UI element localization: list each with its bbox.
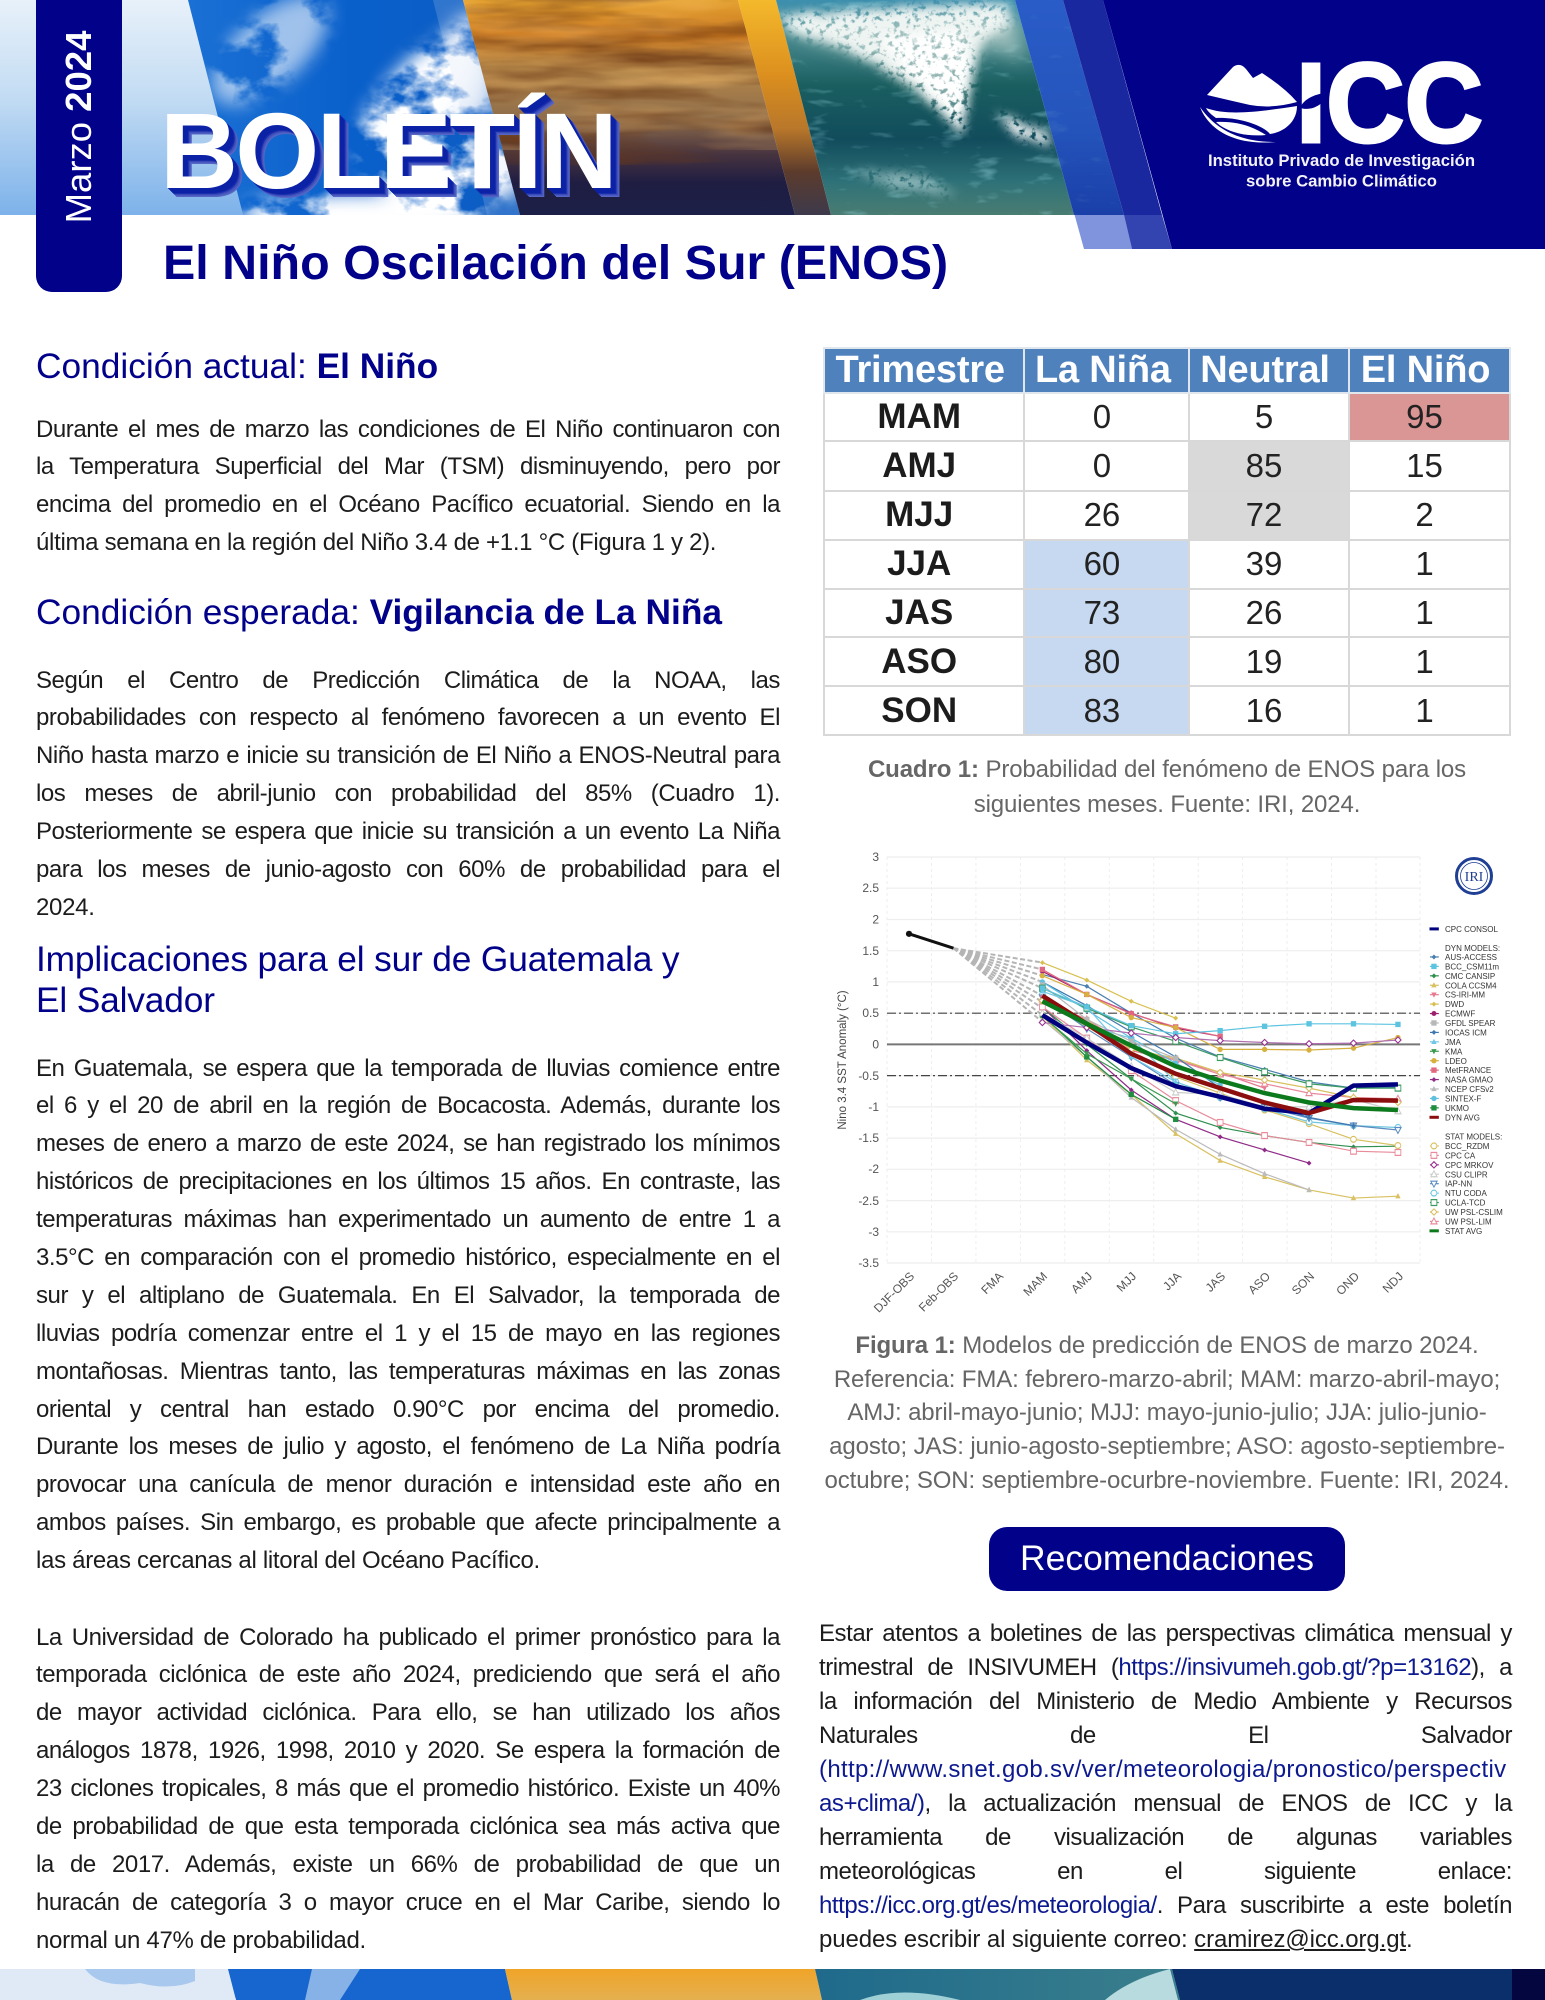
- text block: recomendaciones: puedes escribir al siguiente correo: cramirez@icc.org.gt.: [819, 1926, 1413, 1953]
- text block: pronóstico ciclónico: [36, 1624, 780, 1954]
- logo caption: Instituto Privado de Investigación: [1208, 151, 1475, 170]
- text block: pronóstico ciclónico: de probabilidad de que esta temporada ciclónica sea más activa que: [36, 1813, 780, 1840]
- chart legend: DYN MODELS:: [1445, 944, 1500, 953]
- probability table: JJA: [887, 544, 951, 583]
- chart legend: UW PSL-CSLIM: [1445, 1208, 1503, 1217]
- probability table: La Niña: [1035, 349, 1171, 391]
- text block: implicaciones: Durante los meses de julio y agosto, el fenómeno de La Niña podría: [36, 1433, 780, 1460]
- sky strip blue with clouds: [188, 0, 520, 215]
- ocean wave strip: [776, 0, 1074, 215]
- heading: implicaciones: El Salvador: [36, 981, 215, 1020]
- chart legend: BCC_CSM11m: [1445, 962, 1499, 971]
- y axis labels: -1: [868, 1100, 879, 1114]
- text block: implicaciones: lluvias podría comenzar entre el 1 y el 15 de mayo en las regiones: [36, 1320, 780, 1347]
- y axis labels: 1: [872, 975, 879, 989]
- logo wordmark: ICC: [1296, 40, 1483, 166]
- x axis labels: JJA: [1160, 1269, 1184, 1293]
- figure caption: octubre; SON: septiembre-ocurbre-noviembre. Fuente: IRI, 2024.: [825, 1467, 1509, 1494]
- y axis labels: -0.5: [858, 1069, 879, 1083]
- text block: pronóstico ciclónico: temporada ciclónica de este año 2024, prediciendo que será el año: [36, 1661, 780, 1688]
- sky strip pale: [0, 0, 243, 215]
- observed line: [906, 931, 953, 948]
- text block: condición esperada: probabilidades con respecto al fenómeno favorecen a un evento El: [36, 704, 780, 731]
- probability table: 0: [1093, 398, 1111, 435]
- text block: recomendaciones: meteorológicas en el siguiente enlace:: [819, 1858, 1512, 1885]
- probability table: MAM: [877, 397, 961, 436]
- probability table: 26: [1084, 496, 1120, 533]
- recommendations button: [989, 1527, 1345, 1591]
- probability table: [823, 347, 1511, 736]
- text block: recomendaciones: (http://www.snet.gob.sv/ver/meteorologia/pronostico/perspectiv: [819, 1756, 1506, 1783]
- text block: implicaciones: En Guatemala, se espera que la temporada de lluvias comience entre: [36, 1054, 780, 1082]
- text block: condición actual: la Temperatura Superficial del Mar (TSM) disminuyendo, pero por: [36, 453, 780, 480]
- chart legend: UW PSL-LIM: [1445, 1218, 1492, 1226]
- chart legend: CPC MRKOV: [1445, 1161, 1494, 1170]
- text block: recomendaciones: herramienta de visualización de algunas variables: [819, 1824, 1512, 1851]
- probability table: SON: [881, 691, 957, 730]
- text block: recomendaciones: as+clima/), la actualización mensual de ENOS de ICC y la: [819, 1790, 1512, 1817]
- text block: implicaciones: [36, 1054, 780, 1574]
- probability table: 15: [1406, 447, 1443, 484]
- recommendations button: Recomendaciones: [1020, 1538, 1314, 1578]
- y axis title: Nino 3.4 SST Anomaly (°C): [837, 990, 849, 1130]
- text block: implicaciones: las áreas cercanas al litoral del Océano Pacífico.: [36, 1547, 540, 1574]
- text block: recomendaciones: la información del Ministerio de Medio Ambiente y Recursos: [819, 1688, 1512, 1715]
- line chart: ENSO model predictions: [837, 850, 1503, 1315]
- orange sky strip: [450, 0, 800, 215]
- chart legend: SINTEX-F: [1445, 1095, 1482, 1104]
- probability table: 1: [1415, 692, 1434, 729]
- probability table: 95: [1406, 398, 1443, 435]
- dark blue stripe: [1063, 0, 1162, 215]
- y axis labels: -3: [868, 1225, 879, 1239]
- text block: implicaciones: sur y el altiplano de Guatemala. En El Salvador, la temporada de: [36, 1282, 780, 1309]
- icon: logo leaf: [1300, 92, 1329, 109]
- probability table: El Niño: [1361, 349, 1490, 391]
- y axis labels: -2: [868, 1162, 879, 1176]
- chart legend: STAT MODELS:: [1445, 1133, 1502, 1142]
- probability table: 83: [1084, 692, 1120, 729]
- individual model lines: [1042, 963, 1398, 1198]
- x axis labels: ASO: [1245, 1269, 1273, 1297]
- chart legend: GFDL SPEAR: [1445, 1019, 1496, 1028]
- date text: Marzo 2024: [58, 31, 99, 223]
- chart legend: CSU CLIPR: [1445, 1170, 1488, 1179]
- probability table: 85: [1246, 447, 1282, 484]
- icon: ICC logo mark: [1200, 65, 1297, 143]
- title: BOLETÍN: BOLETÍN: [160, 90, 615, 211]
- text block: implicaciones: ambos países. Sin embargo, es probable que afecte principalmente a: [36, 1509, 780, 1536]
- y axis labels: 1.5: [862, 944, 879, 958]
- chart legend: JMA: [1445, 1038, 1462, 1047]
- y axis labels: [858, 850, 879, 1270]
- text block: pronóstico ciclónico: 23 ciclones tropicales, 8 más que el promedio histórico. Existe un 40%: [36, 1775, 780, 1802]
- table caption: Cuadro 1: Probabilidad del fenómeno de ENOS para los: [868, 756, 1466, 782]
- text block: condición esperada: para los meses de junio-agosto con 60% de probabilidad para el: [36, 856, 780, 883]
- probability table: 73: [1084, 594, 1120, 631]
- text block: pronóstico ciclónico: análogos 1878, 1926, 1998, 2010 y 2020. Se espera la formación de: [36, 1737, 780, 1764]
- threshold lines: [887, 1013, 1420, 1076]
- x axis labels: [871, 1269, 1406, 1315]
- probability table: 2: [1415, 496, 1434, 533]
- chart legend: COLA CCSM4: [1445, 981, 1497, 990]
- text block: condición esperada: Según el Centro de Predicción Climática de la NOAA, las: [36, 666, 780, 694]
- navy corner panel: [1103, 0, 1545, 249]
- chart legend: UCLA-TCD: [1445, 1199, 1486, 1208]
- translucent blue stripe: [1015, 0, 1124, 215]
- legend symbols: [1430, 929, 1439, 1231]
- x axis labels: MJJ: [1114, 1269, 1139, 1295]
- text block: implicaciones: provocar una canícula de menor duración e intensidad este año en: [36, 1471, 780, 1498]
- probability table: MJJ: [885, 495, 953, 534]
- golden strip: [738, 0, 831, 215]
- model series: [906, 929, 1439, 1231]
- chart legend: BCC_RZDM: [1445, 1142, 1490, 1151]
- table caption: [868, 756, 1466, 818]
- x axis labels: OND: [1333, 1269, 1362, 1298]
- chart legend: ECMWF: [1445, 1010, 1475, 1019]
- chart legend: MetFRANCE: [1445, 1066, 1491, 1075]
- x axis labels: AMJ: [1068, 1269, 1095, 1296]
- chart legend: KMA: [1445, 1047, 1463, 1056]
- text block: pronóstico ciclónico: La Universidad de Colorado ha publicado el primer pronóstico para la: [36, 1624, 780, 1650]
- chart legend: IOCAS ICM: [1445, 1028, 1487, 1038]
- text block: condición esperada: 2024.: [36, 894, 95, 921]
- chart legend: CPC CA: [1445, 1151, 1476, 1160]
- dashed transition lines: [953, 948, 1042, 1022]
- x axis labels: MAM: [1020, 1269, 1050, 1299]
- heading: implicaciones: [36, 940, 680, 1020]
- chart legend: STAT AVG: [1445, 1227, 1482, 1236]
- chart legend: UKMO: [1445, 1104, 1469, 1113]
- probability table: 19: [1246, 643, 1282, 680]
- medium stripe below the banner: [1124, 215, 1172, 249]
- icon: IRI logo: IRI: [1465, 870, 1484, 885]
- x axis labels: SON: [1289, 1269, 1317, 1298]
- x axis labels: NDJ: [1380, 1269, 1406, 1296]
- text block: pronóstico ciclónico: de mayor actividad ciclónica. Para ello, se han utilizado los años: [36, 1699, 780, 1726]
- chart legend: NASA GMAO: [1445, 1076, 1493, 1085]
- text block: recomendaciones: [819, 1620, 1512, 1953]
- chart legend: DWD: [1445, 1000, 1464, 1009]
- text block: condición esperada: Niño hasta marzo e inicie su transición de El Niño a ENOS-Neutral para: [36, 742, 780, 769]
- probability table: JAS: [885, 593, 953, 632]
- text block: condición esperada: Posteriormente se espera que inicie su transición a un evento La Niña: [36, 818, 780, 845]
- y axis labels: 0.5: [862, 1006, 879, 1020]
- chart legend: AUS-ACCESS: [1445, 953, 1497, 962]
- header photo banner: [0, 0, 1545, 249]
- x axis labels: FMA: [978, 1269, 1006, 1297]
- y axis labels: -2.5: [858, 1194, 879, 1208]
- probability table: 0: [1093, 447, 1111, 484]
- text block: condición esperada: [36, 666, 780, 921]
- figure caption: Referencia: FMA: febrero-marzo-abril; MAM: marzo-abril-mayo;: [834, 1366, 1500, 1393]
- x axis labels: DJF-OBS: [871, 1269, 917, 1315]
- chart legend: [1445, 925, 1503, 1236]
- light stripe below the banner: [1075, 215, 1132, 249]
- y axis labels: 2: [872, 912, 879, 926]
- chart legend: LDEO: [1445, 1057, 1467, 1066]
- y axis labels: 0: [872, 1038, 879, 1052]
- y axis labels: 3: [872, 850, 879, 864]
- text block: implicaciones: oriental y central han estado 0.90°C por encima del promedio.: [36, 1396, 780, 1423]
- text block: implicaciones: el 6 y el 20 de abril en la región de Bocacosta. Además, durante los: [36, 1092, 780, 1119]
- probability table: Neutral: [1200, 349, 1330, 391]
- average lines: [1042, 996, 1398, 1113]
- probability table: 16: [1246, 692, 1282, 729]
- probability table: 5: [1255, 398, 1273, 435]
- text block: condición actual: Durante el mes de marzo las condiciones de El Niño continuaron con: [36, 416, 780, 442]
- chart legend: IAP-NN: [1445, 1180, 1472, 1189]
- text block: recomendaciones: trimestral de INSIVUMEH (https://insivumeh.gob.gt/?p=13162), a: [819, 1654, 1512, 1681]
- table caption: siguientes meses. Fuente: IRI, 2024.: [974, 790, 1360, 818]
- date tab: [36, 0, 122, 292]
- figure caption: agosto; JAS: junio-agosto-septiembre; ASO: agosto-septiembre-: [829, 1433, 1505, 1460]
- icon: IRI logo: [1456, 858, 1492, 894]
- probability table: 80: [1084, 643, 1120, 680]
- probability table: 60: [1084, 545, 1120, 582]
- probability table: 1: [1415, 594, 1434, 631]
- chart legend: CPC CONSOL: [1445, 925, 1498, 934]
- chart grid: [887, 857, 1420, 1263]
- text block: condición actual: encima del promedio en el Océano Pacífico ecuatorial. Siendo en la: [36, 491, 780, 518]
- x axis labels: Feb-OBS: [916, 1269, 961, 1314]
- logo caption: sobre Cambio Climático: [1246, 172, 1437, 190]
- heading: implicaciones: Implicaciones para el sur de Guatemala y: [36, 940, 679, 979]
- chart legend: NTU CODA: [1445, 1189, 1487, 1198]
- chart legend: CMC CANSIP: [1445, 972, 1495, 981]
- text block: implicaciones: meses de enero a marzo de este 2024, se han registrado los mínimos: [36, 1130, 780, 1157]
- text block: pronóstico ciclónico: huracán de categoría 3 o mayor cruce en el Mar Caribe, siendo lo: [36, 1889, 780, 1916]
- probability table: Trimestre: [836, 349, 1005, 391]
- subtitle: El Niño Oscilación del Sur (ENOS): [163, 236, 948, 290]
- probability table: 1: [1415, 643, 1434, 680]
- footer photo band: [0, 1969, 1545, 2000]
- chart legend: DYN AVG: [1445, 1113, 1480, 1122]
- probability table: AMJ: [882, 446, 956, 485]
- text block: implicaciones: temperaturas máximas han experimentado un aumento de entre 1 a: [36, 1206, 780, 1233]
- text block: condición esperada: los meses de abril-junio con probabilidad del 85% (Cuadro 1).: [36, 780, 780, 807]
- chart legend: CS-IRI-MM: [1445, 991, 1485, 1000]
- text block: recomendaciones: https://icc.org.gt/es/meteorologia/. Para suscribirte a este boletín: [819, 1892, 1512, 1919]
- y axis labels: -3.5: [858, 1256, 879, 1270]
- text block: recomendaciones: Estar atentos a boletines de las perspectivas climática mensual y: [819, 1620, 1512, 1647]
- text block: pronóstico ciclónico: la de 2017. Además, existe un 66% de probabilidad de que un: [36, 1851, 780, 1878]
- probability table: ASO: [881, 642, 957, 681]
- x axis labels: JAS: [1203, 1269, 1228, 1295]
- logo caption: [1208, 151, 1475, 190]
- figure caption: [825, 1332, 1509, 1494]
- chart legend: NCEP CFSv2: [1445, 1085, 1494, 1094]
- probability table: 26: [1246, 594, 1282, 631]
- probability table: 72: [1246, 496, 1282, 533]
- text block: recomendaciones: Naturales de El Salvador: [819, 1722, 1512, 1749]
- text block: implicaciones: montañosas. Mientras tanto, las temperaturas máximas en las zonas: [36, 1358, 780, 1385]
- y axis labels: -1.5: [858, 1131, 879, 1145]
- probability table: 1: [1415, 545, 1434, 582]
- text block: implicaciones: 3.5°C en comparación con el promedio histórico, especialmente en el: [36, 1244, 780, 1271]
- text block: implicaciones: históricos de precipitaciones en los últimos 15 años. En contraste, las: [36, 1168, 780, 1195]
- heading: condición esperada: Condición esperada: Vigilancia de La Niña: [36, 592, 722, 632]
- figure caption: AMJ: abril-mayo-junio; MJJ: mayo-junio-julio; JJA: julio-junio-: [847, 1399, 1487, 1426]
- heading: condición actual: Condición actual: El Niño: [36, 346, 438, 386]
- probability table: 39: [1246, 545, 1282, 582]
- text block: condición actual: última semana en la región del Niño 3.4 de +1.1 °C (Figura 1 y 2).: [36, 529, 716, 556]
- text block: condición actual: [36, 416, 780, 556]
- y axis labels: 2.5: [862, 881, 879, 895]
- text block: pronóstico ciclónico: normal un 47% de probabilidad.: [36, 1927, 366, 1954]
- figure caption: Figura 1: Modelos de predicción de ENOS de marzo 2024.: [855, 1332, 1479, 1359]
